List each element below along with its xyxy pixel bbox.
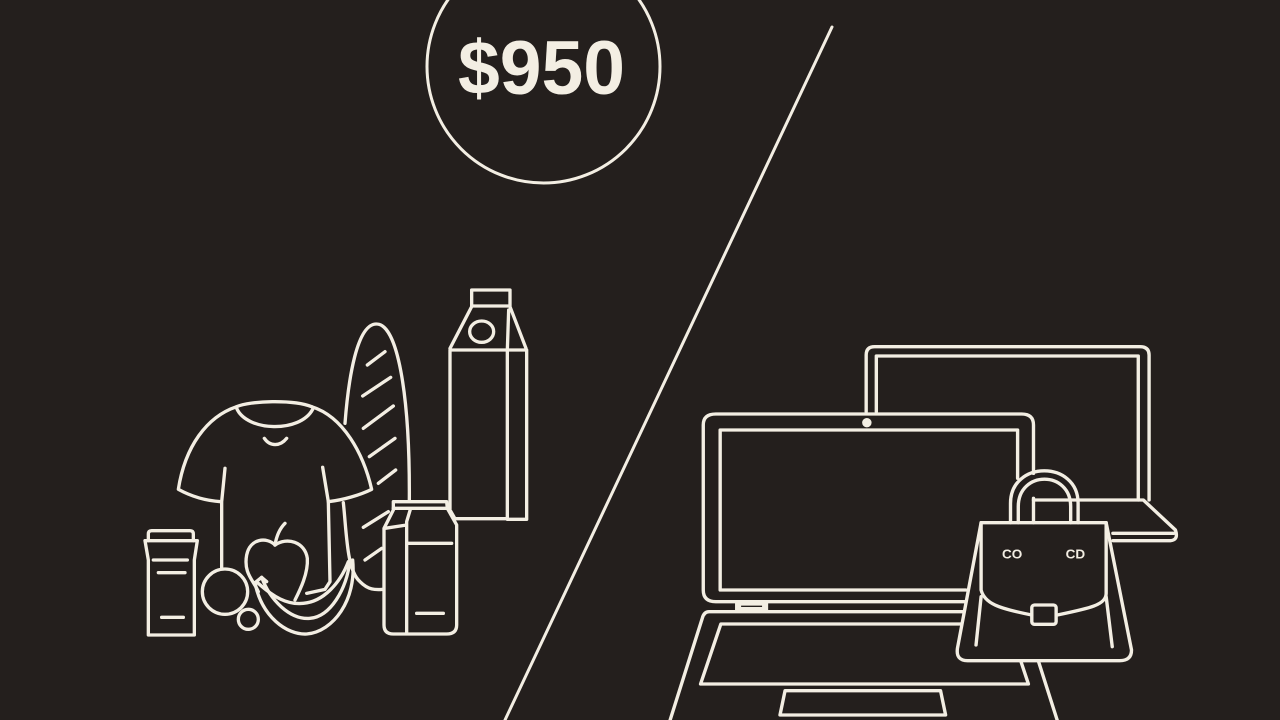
icon: carton [450, 290, 527, 519]
icon: back laptop [866, 347, 1176, 541]
bag logo marks [1002, 546, 1085, 561]
bag logo marks: CD [1066, 546, 1085, 561]
diagonal divider [505, 27, 832, 720]
icon: baguette [343, 324, 409, 590]
icon: front laptop [670, 414, 1057, 720]
everyday essentials icons [145, 290, 527, 635]
icon: cup [145, 531, 197, 635]
icon: apple [246, 523, 307, 600]
icon: round fruits [202, 569, 258, 629]
icon: t-shirt [178, 402, 372, 593]
icon: bananas [255, 560, 353, 634]
icon: handbag [957, 471, 1132, 661]
luxury goods icons [670, 347, 1176, 720]
bag logo marks: CO [1002, 546, 1022, 561]
price circle badge [427, 0, 660, 183]
price circle badge: $950 [458, 26, 625, 111]
icon: jar [384, 502, 457, 634]
